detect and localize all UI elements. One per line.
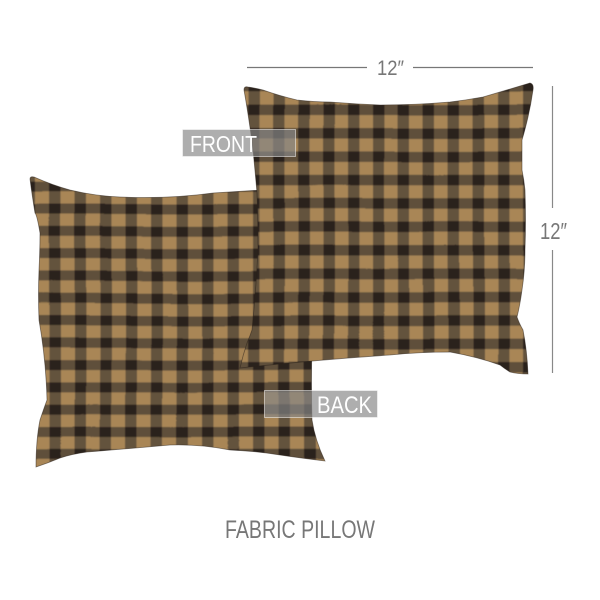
front pillow [240, 82, 534, 374]
caption: FABRIC PILLOW [225, 516, 375, 544]
dimension: height 12 inches: 12″ [540, 218, 567, 244]
label: front: FRONT [190, 131, 257, 157]
dimension: width 12 inches: 12″ [377, 57, 404, 80]
label: back: BACK [317, 392, 372, 419]
label: back [264, 390, 378, 419]
back pillow [30, 176, 326, 468]
label: front [182, 130, 296, 157]
